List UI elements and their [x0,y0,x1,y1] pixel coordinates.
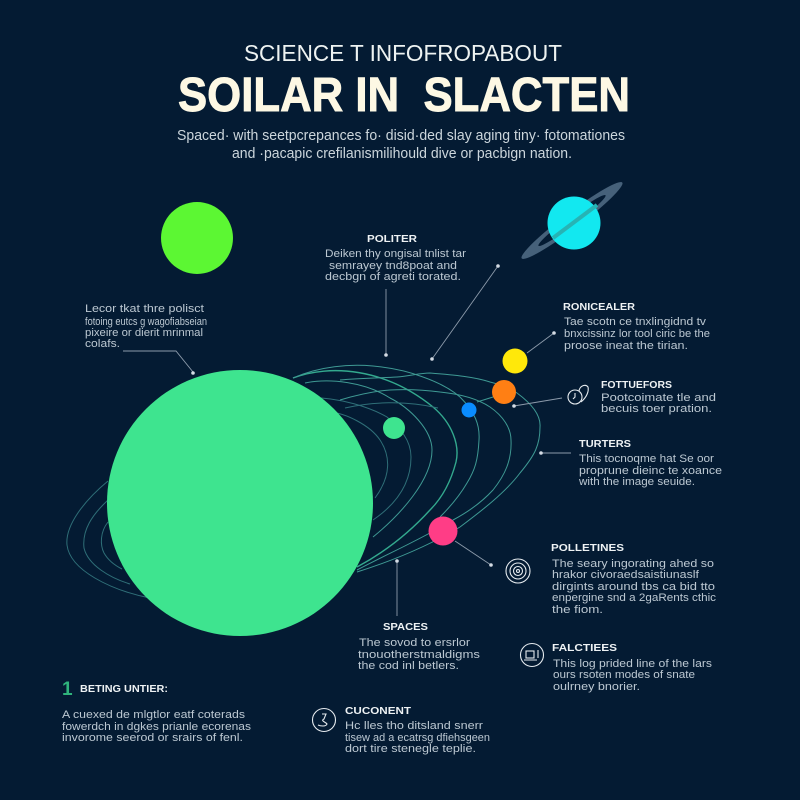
callout: politer: semrayey tnd8poat and [329,260,457,272]
callout: polletines: POLLETINES [551,543,624,554]
callout: cuconent: tisew ad a ecatrsg dfiehsgeen [345,732,490,744]
orange planet [492,380,516,404]
callout: turters: proprune dieinc te xoance [579,465,722,477]
callout: ronicealer: RONICEALER [563,302,636,313]
callout: falctiees: ours rsoten modes of snate [553,669,695,681]
callout: ronicealer: Tae scotn ce tnxlingidnd tv [564,316,707,328]
callout: fottuefors: FOTTUEFORS [601,380,672,391]
numeral 1: 1 [62,679,73,700]
callout: left note: pixeire or dierit mrinmal [85,327,203,339]
callout: turters: with the image seuide. [578,476,695,488]
callout: being untier: invorome seerod or srairs of fenl. [62,732,243,744]
callout: left note: fotoing eutcs g wagofiabseian [85,316,207,328]
callout: spaces: the cod inl betlers. [358,660,459,672]
callout: being untier: fowerdch in dgkes prianle ecorenas [62,721,252,733]
callout: ronicealer: bnxcissinz lor tool ciric be the [564,328,710,340]
yellow planet [502,348,528,374]
callout: cuconent [345,706,490,755]
callout: polletines: dirgints around tbs ca bid tto [552,581,715,593]
callout: turters: This tocnoqme hat Se oor [579,453,714,465]
callout: left note [85,303,207,350]
subtitle [177,127,625,162]
callout: fottuefors: Pootcoimate tle and [601,392,716,404]
icon: spiral target [506,559,530,583]
main title: SOILAR IN SLACTEN [178,69,630,122]
callout: polletines: hrakor civoraedsaistiunaslf [552,569,700,581]
callout: left note: colafs. [85,338,120,350]
icon: stopwatch [568,385,588,404]
callout: fottuefors: becuis toer pration. [601,403,712,415]
callout: falctiees: This log prided line of the lars [553,658,713,670]
callout: left note: Lecor tkat thre polisct [85,303,204,315]
pink planet [428,516,458,546]
header [177,40,630,162]
callout: politer: decbgn of agreti torated. [325,271,461,283]
callout: spaces: The sovod to ersrlor [359,637,470,649]
callout: being untier: A cuexed de mlgtlor eatf coterads [62,709,246,721]
callout: being untier [62,679,252,744]
small mint planet [383,417,405,439]
callout: spaces: tnouotherstmaldigms [358,649,481,661]
icon: laptop badge [520,644,544,666]
callout: polletines: the fiom. [552,604,603,616]
callout: turters [578,439,722,488]
subtitle: Spaced· with seetpcrepances fo· disid·ded slay aging tiny· fotomationes [177,127,625,144]
callout: ronicealer: proose ineat the tirian. [564,340,688,352]
blue planet [462,402,476,418]
callout: cuconent: Hc lles tho ditsland snerr [345,720,483,732]
callout: being untier: BETING UNTIER: [80,684,168,695]
lime planet [161,202,233,274]
callout: falctiees: oulrney bnorier. [553,681,640,693]
callout: politer: Deiken thy ongisal tnlist tar [325,248,466,260]
orbit lines [67,365,540,598]
callout: ronicealer [563,302,710,352]
callout: falctiees [552,643,713,693]
large green planet [107,370,373,636]
callout: cuconent: dort tire stenegle teplie. [345,743,476,755]
callout: spaces [358,622,481,672]
connector lines [123,264,571,616]
callout: polletines [551,543,717,616]
callout: turters: TURTERS [579,439,631,450]
callout: spaces: SPACES [383,622,428,633]
callout: fottuefors [601,380,716,415]
eyebrow title: SCIENCE T INFOFROPABOUT [244,40,562,66]
ringed cyan planet [517,176,627,265]
callout: cuconent: CUCONENT [345,706,411,717]
callout: polletines: enpergine snd a 2gaRents cthic [552,592,717,604]
callout: politer: POLITER [367,234,418,245]
callout: polletines: The seary ingorating ahed so [552,558,714,570]
icon: figure badge [312,708,336,732]
subtitle: and ·pacapic crefilanismilihould dive or pacbign nation. [232,145,572,162]
callout: politer [325,234,466,283]
callout: falctiees: FALCTIEES [552,643,617,654]
